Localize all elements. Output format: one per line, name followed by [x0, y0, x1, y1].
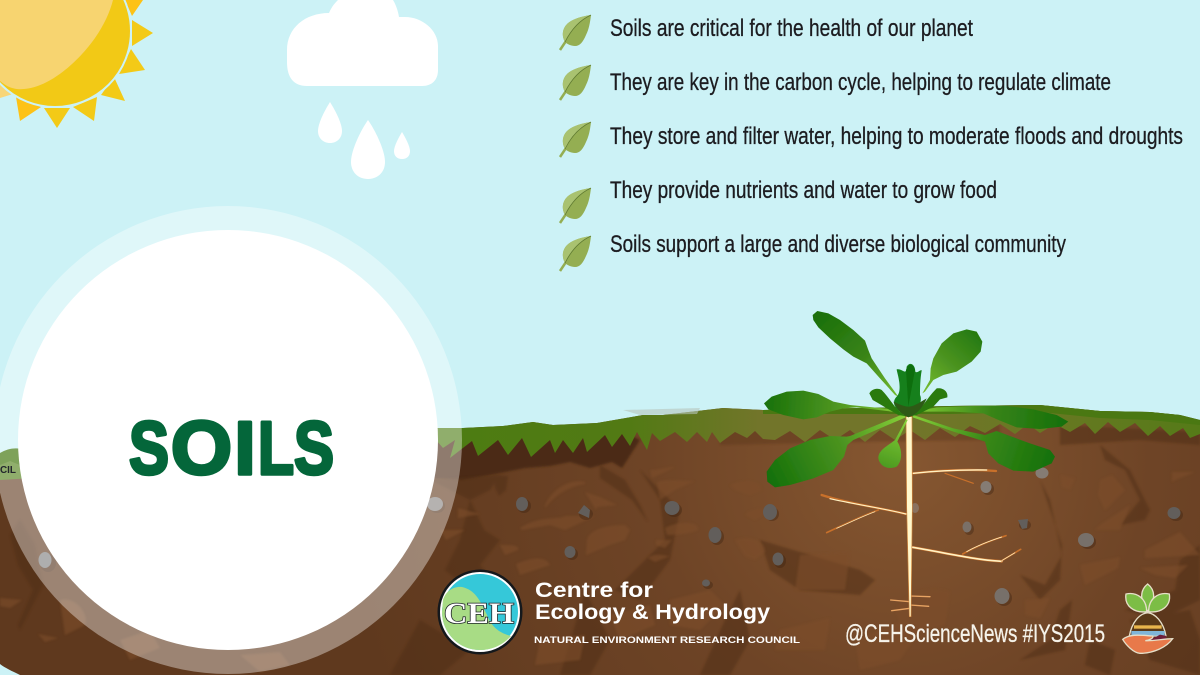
- ground: soil cross-section: [0, 405, 1200, 675]
- logo text: Centre for Ecology & Hydrology: Ecology & Hydrology: [535, 601, 770, 624]
- bullet 4: [560, 177, 997, 223]
- soil body: [0, 405, 1200, 675]
- faint horizon strip: [623, 408, 700, 415]
- bullet list: [560, 15, 1183, 271]
- logo: International Year of Soils: [1123, 584, 1173, 653]
- title: O: [171, 406, 232, 490]
- cloud: [287, 0, 438, 86]
- plant: [764, 311, 1068, 617]
- icon: rain cloud: [287, 0, 438, 179]
- bullet 1: Soils are critical for the health of our planet: [610, 15, 973, 42]
- leaf: left: [764, 391, 900, 419]
- social handle and hashtag: @CEHScienceNews #IYS2015: [845, 620, 1105, 648]
- plant crown: [869, 364, 947, 417]
- title: I: [234, 406, 256, 490]
- bullet 2: [560, 65, 1111, 100]
- title circle: [18, 230, 438, 650]
- halo ring around title circle: [0, 206, 462, 674]
- roots: [822, 470, 1021, 611]
- logo: CEH: [438, 570, 522, 654]
- stones: [38, 468, 1183, 606]
- bullet 3: [560, 122, 1183, 157]
- left hill and cut-off council text: [0, 448, 24, 476]
- bullet 5: Soils support a large and diverse biological community: [610, 231, 1066, 258]
- leaf: small centre: [878, 419, 908, 468]
- logo text: Centre for Ecology & Hydrology: Centre for: [535, 579, 653, 602]
- bullet 5: [560, 231, 1066, 271]
- title: [129, 406, 334, 490]
- lighter soil patches: [0, 467, 1200, 672]
- raindrop small left: [318, 102, 342, 143]
- title: L: [258, 406, 294, 490]
- raindrop large: [351, 120, 385, 179]
- bullet 1: [560, 15, 973, 50]
- bullet 4: They provide nutrients and water to grow food: [610, 177, 997, 204]
- leaf: upper left: [813, 311, 898, 397]
- leaf: upper right: [922, 329, 982, 393]
- logo text: Centre for Ecology & Hydrology: [534, 579, 800, 646]
- raindrop small right: [394, 132, 410, 159]
- left hill and cut-off council text: CIL: [0, 465, 16, 476]
- main root: [906, 417, 912, 617]
- logo text: Centre for Ecology & Hydrology: NATURAL ENVIRONMENT RESEARCH COUNCIL: [534, 635, 800, 646]
- leaf: right: [913, 406, 1068, 429]
- logo: CEH: CEH: [444, 597, 514, 630]
- top dark-green grass line: [763, 405, 1200, 425]
- dark soil cracks and shadows: [10, 425, 1200, 675]
- leaf: lower left: [767, 414, 906, 487]
- dark soil under grass: [420, 425, 640, 480]
- title: S: [129, 406, 169, 490]
- leaf: lower right: [913, 415, 1055, 472]
- grass fringe: [0, 405, 1200, 480]
- title: S: [294, 406, 334, 490]
- icon: sun: [0, 0, 153, 128]
